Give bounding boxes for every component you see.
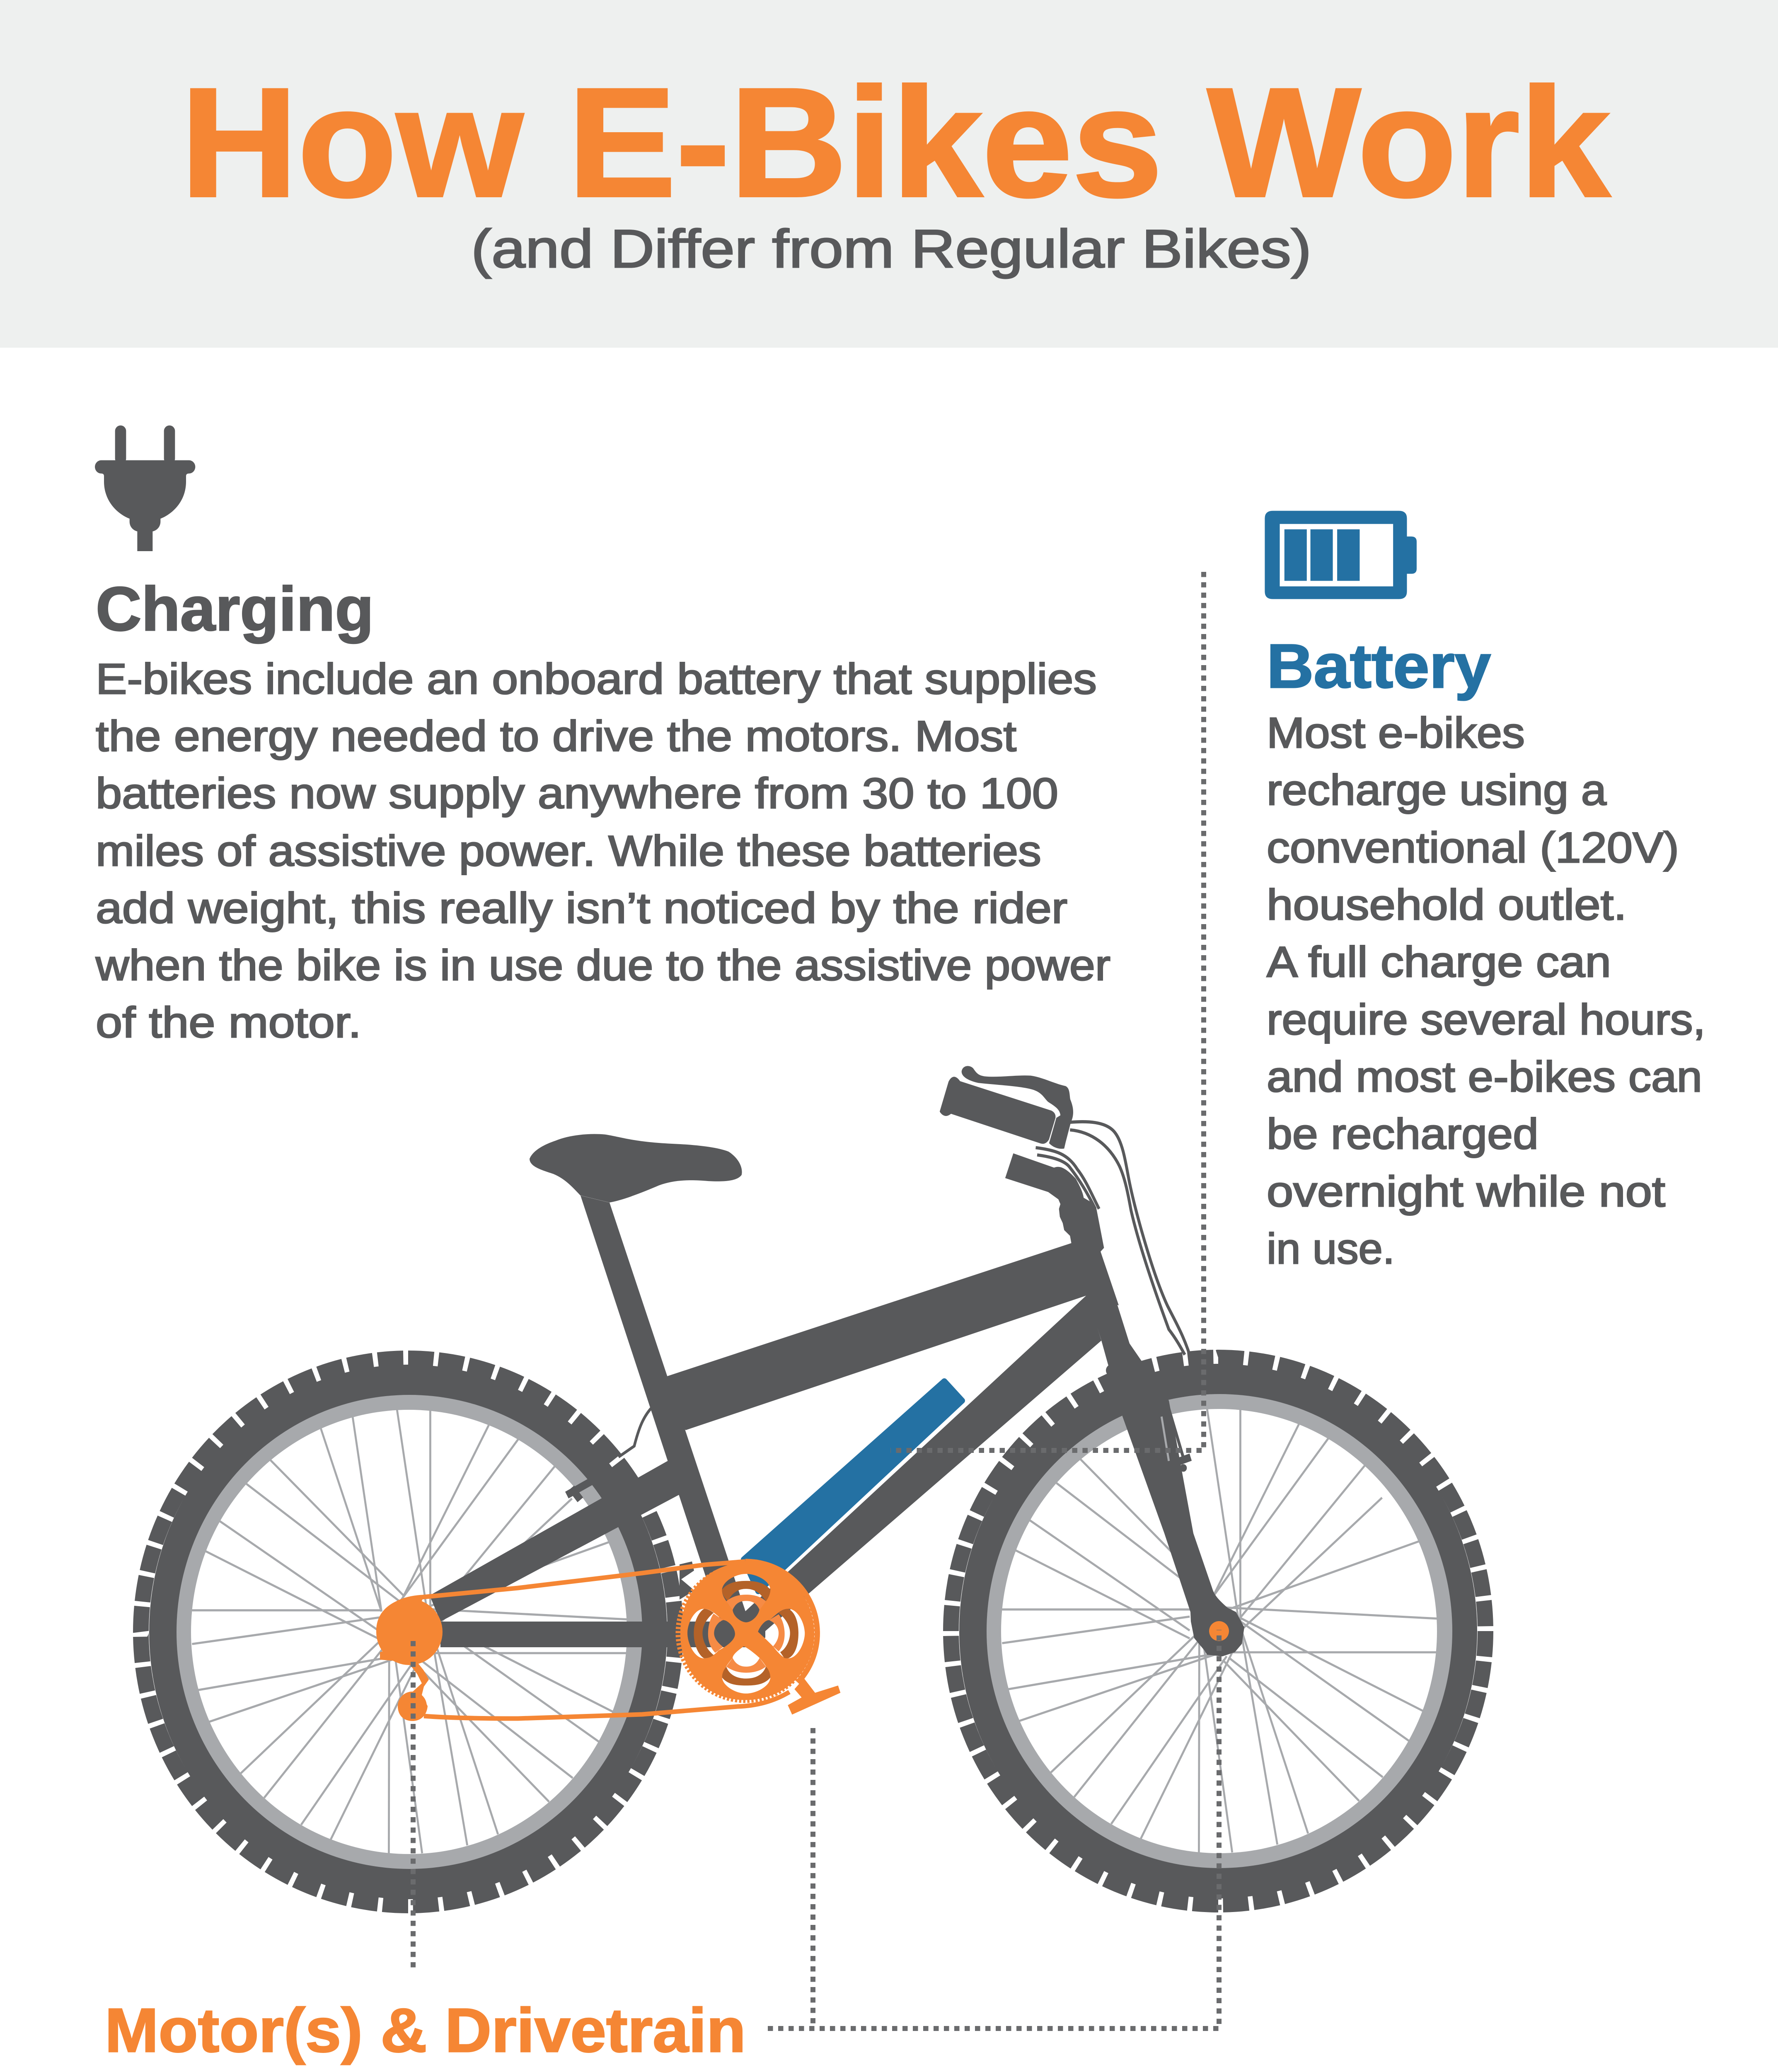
dotted leader: battery [890, 572, 1204, 1450]
text: battery body [1267, 709, 1705, 1273]
text: battery body: be recharged [1267, 1110, 1539, 1158]
chainring and drivetrain [376, 1561, 840, 1721]
rear wheel [141, 1358, 675, 1905]
header band [0, 0, 1778, 348]
text: charging body: E-bikes include an onboard battery that supplies [96, 655, 1097, 703]
text: battery body: require several hours, [1267, 996, 1705, 1044]
inner gear bands [694, 1581, 798, 1685]
bike frame [430, 1196, 1119, 1647]
panel: charging [95, 426, 1110, 1047]
text: battery body: and most e-bikes can [1267, 1053, 1702, 1101]
heading: motors: Motor(s) & Drivetrain [105, 1995, 746, 2065]
handlebars and brake cables [941, 1066, 1192, 1472]
rear sprocket [376, 1596, 443, 1721]
chainring body [680, 1563, 840, 1715]
title: How E-Bikes Work [181, 56, 1611, 229]
text: charging body [95, 655, 1110, 1047]
panel: battery [1265, 511, 1705, 1273]
icon: plug [95, 426, 195, 551]
heading: charging: Charging [96, 574, 374, 644]
text: battery body: Most e-bikes [1267, 709, 1525, 757]
fork and head tube [1072, 1243, 1244, 1656]
text: charging body: add weight, this really isn’t noticed by the rider [96, 884, 1067, 932]
text: charging body: of the motor. [96, 999, 361, 1047]
battery pack on down tube [744, 1381, 962, 1591]
front wheel [951, 1358, 1485, 1905]
subtitle: (and Differ from Regular Bikes) [471, 218, 1311, 279]
text: battery body: conventional (120V) [1267, 824, 1679, 872]
dotted leader: rear motor [411, 1641, 416, 1971]
text: charging body: miles of assistive power. While these batteries [96, 827, 1041, 875]
front hub axle [1209, 1621, 1229, 1641]
text: battery body: in use. [1267, 1225, 1395, 1273]
text: battery body: A full charge can [1267, 938, 1611, 986]
text: charging body: the energy needed to drive the motors. Most [96, 712, 1016, 760]
chain [398, 1561, 817, 1719]
chainring teeth [678, 1566, 813, 1700]
text: battery body: household outlet. [1267, 881, 1627, 929]
text: charging body: batteries now supply anywhere from 30 to 100 [96, 770, 1058, 818]
icon: battery [1265, 511, 1417, 599]
text: battery body: overnight while not [1267, 1168, 1665, 1216]
rear brake [567, 1407, 652, 1500]
text: battery body: recharge using a [1267, 766, 1606, 814]
bicycle illustration [141, 1066, 1485, 1905]
crank arm and pedal [788, 1678, 840, 1715]
saddle [530, 1134, 742, 1203]
heading: battery: Battery [1267, 631, 1491, 701]
text: charging body: when the bike is in use due to the assistive power [95, 942, 1110, 990]
dotted leader: mid motor and front hub [768, 1630, 1219, 2028]
